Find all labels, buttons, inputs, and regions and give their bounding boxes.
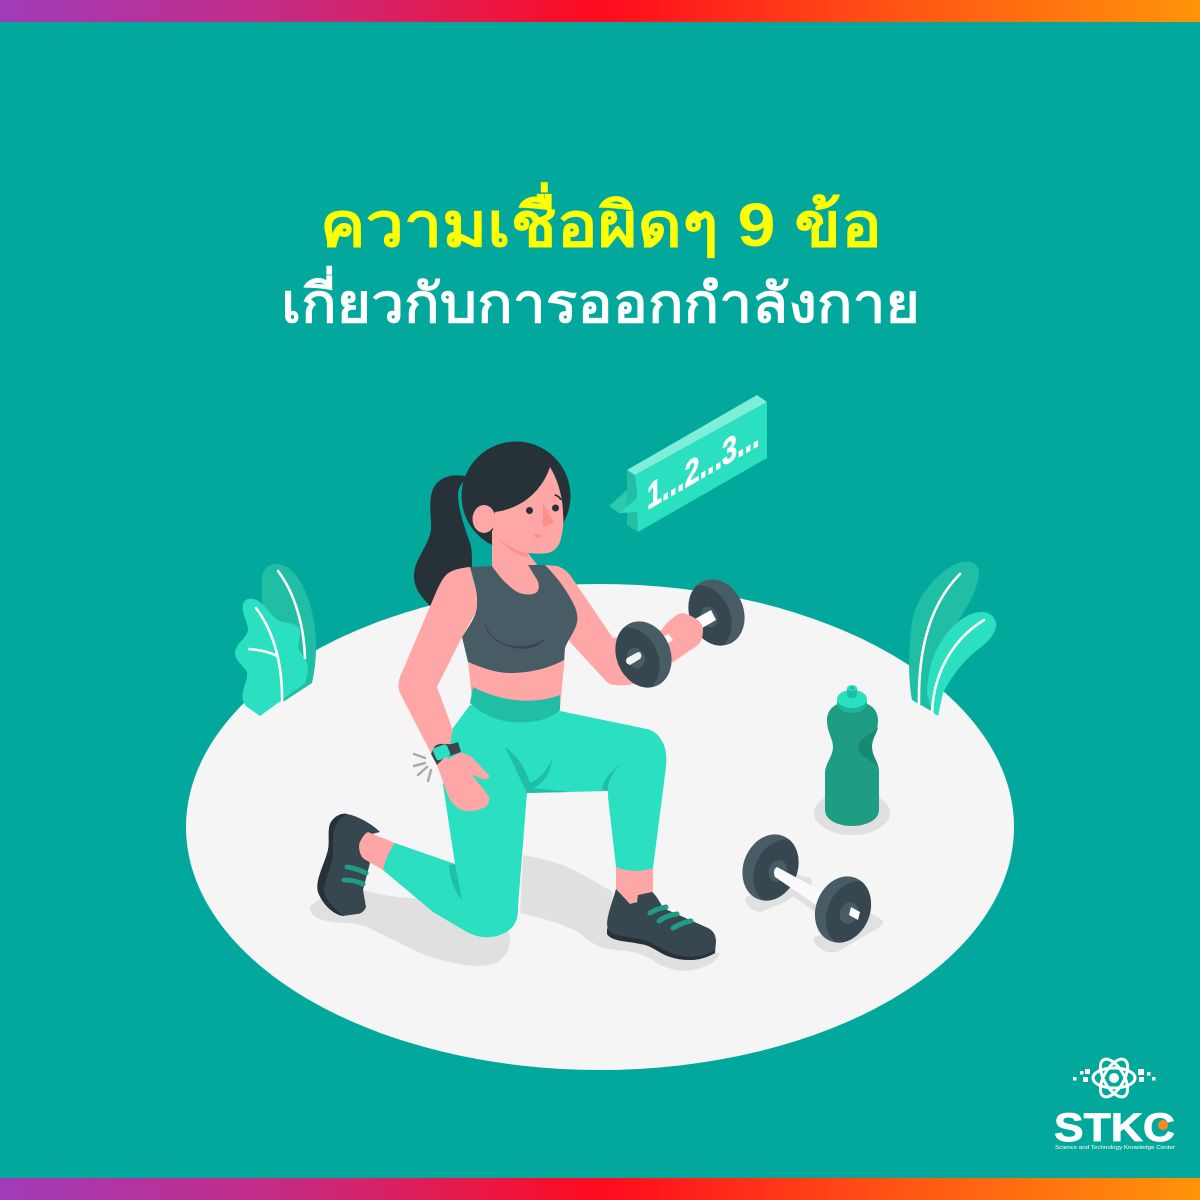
front shoe sole (607, 928, 715, 960)
back shoe straps (344, 867, 366, 884)
sports top (462, 565, 577, 673)
water bottle (814, 685, 890, 835)
eyes (526, 494, 562, 514)
back shoe (317, 814, 380, 916)
front shoe (607, 889, 716, 960)
handle end (626, 652, 641, 665)
gripping hand (660, 613, 703, 662)
logo wordmark: STKC (1054, 1106, 1175, 1150)
mouth (533, 533, 542, 538)
plant: right (909, 562, 996, 716)
bubble text: 1...2...3... (647, 412, 760, 518)
floor shadows under figure (310, 855, 720, 971)
neck shadow (499, 538, 528, 557)
speech bubble: 1...2...3... (609, 395, 767, 532)
pixel squares (1073, 1069, 1156, 1082)
ponytail (414, 475, 472, 606)
watch (431, 742, 461, 765)
floor dumbbell (742, 834, 883, 952)
woman figure (317, 442, 754, 960)
leggings creases (449, 747, 622, 900)
motion ticks (414, 754, 431, 781)
held dumbbell (615, 579, 745, 688)
near plate (606, 613, 681, 696)
face (493, 467, 563, 554)
nose (543, 503, 554, 527)
ear (472, 505, 496, 533)
title line 1: ความเชื่อผิดๆ 9 ข้อ (320, 182, 882, 259)
STKC logo (1054, 1055, 1175, 1151)
title (281, 182, 920, 334)
top gradient bar (0, 0, 1200, 22)
far plate (679, 571, 754, 654)
plant: left (235, 564, 316, 716)
floor ellipse (186, 584, 1014, 1070)
left arm (398, 567, 480, 765)
midriff (468, 655, 565, 708)
right arm (545, 565, 703, 685)
back shoe sole (317, 814, 347, 916)
hair (462, 442, 570, 550)
title line 2: เกี่ยวกับการออกกำลังกาย (281, 266, 920, 334)
hand on knee (437, 752, 489, 811)
top crease (485, 623, 546, 649)
front ankle (616, 865, 653, 906)
neck and chest (492, 530, 545, 600)
handle (636, 610, 716, 663)
front shoe straps (650, 907, 691, 928)
bottom gradient bar (0, 1178, 1200, 1200)
back ankle (359, 832, 395, 870)
logo tagline: Science and Technology Knowledge Center (1055, 1145, 1175, 1151)
leggings (383, 705, 666, 937)
atom icon (1093, 1055, 1135, 1101)
waistband (470, 687, 560, 722)
orange dot (1158, 1120, 1168, 1130)
